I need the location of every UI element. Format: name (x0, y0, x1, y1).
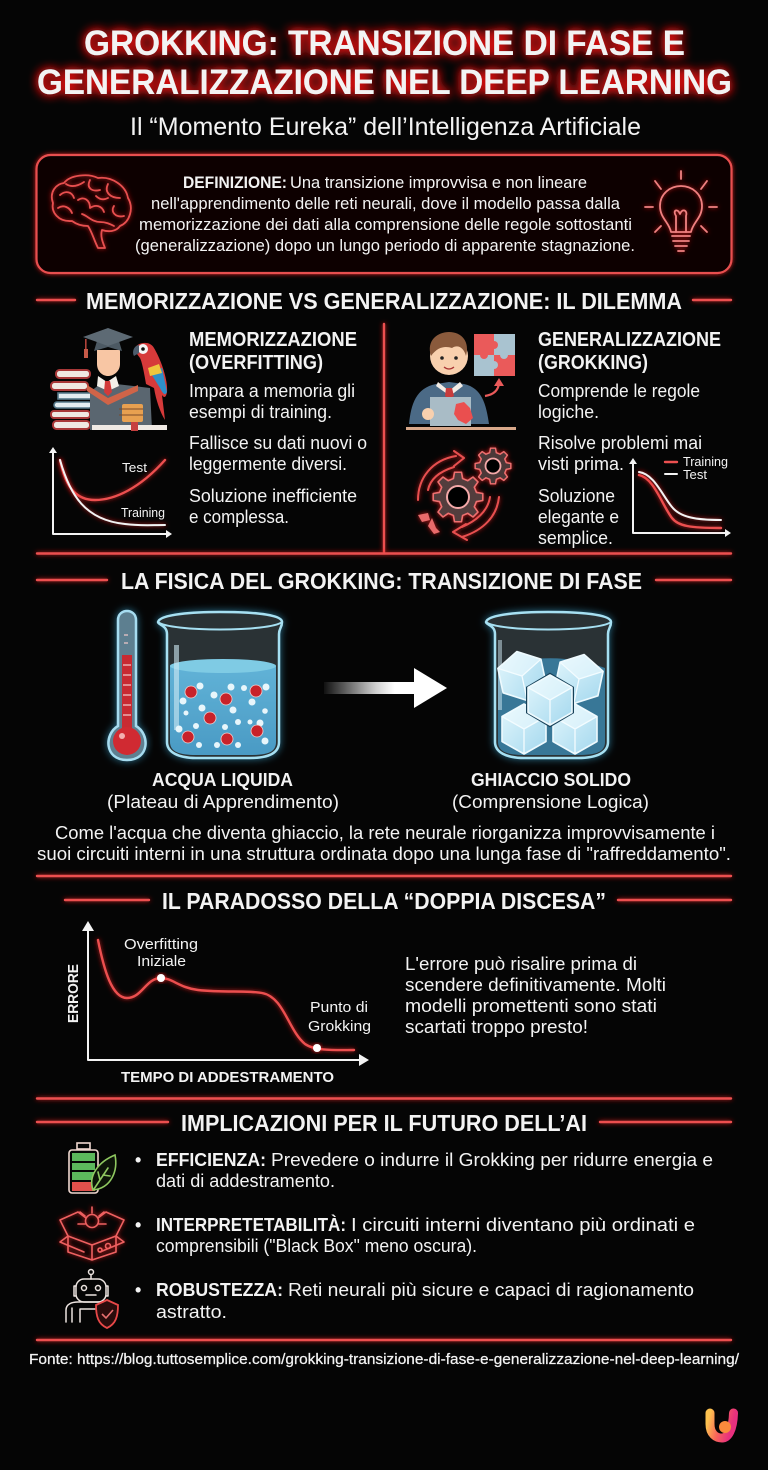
item: interpretabilita: • (135, 1215, 141, 1235)
panel: memorizzazione (49, 328, 367, 538)
text: memorizzazione: leggermente diversi. (189, 454, 347, 474)
icon: robot with shield (66, 1270, 118, 1328)
text: memorizzazione: Fallisce su dati nuovi o (189, 433, 367, 453)
text: memorizzazione: e complessa. (189, 507, 289, 527)
icon: beaker with ice (486, 612, 611, 758)
item: efficienza: EFFICIENZA: (156, 1150, 266, 1170)
title: GROKKING: TRANSIZIONE DI FASE E (84, 24, 685, 63)
item: interpretabilita: comprensibili ("Black Box" meno oscura). (156, 1236, 477, 1256)
item: efficienza: Prevedere o indurre il Grokking per ridurre energia e (271, 1150, 713, 1170)
icon: thermometer (108, 611, 146, 760)
item: efficienza: • (135, 1150, 141, 1170)
text: generalizzazione: Comprende le regole (538, 381, 700, 401)
definition text (135, 173, 635, 255)
text: memorizzazione: Soluzione inefficiente (189, 486, 357, 506)
chart: overfitting: Training (121, 506, 165, 520)
source: Fonte: https://blog.tuttosemplice.com/grokking-transizione-di-fase-e-generalizzazione-nel-deep-learning/ (29, 1351, 740, 1368)
definition text: nell'apprendimento delle reti neurali, dove il modello passa dalla (151, 194, 621, 213)
icon: battery with leaf (69, 1143, 116, 1193)
text: generalizzazione: GENERALIZZAZIONE (538, 329, 721, 351)
heading: memorizzazione vs generalizzazione: MEMORIZZAZIONE VS GENERALIZZAZIONE: IL DILEMMA (86, 288, 682, 314)
icon: graduate, books and parrot (51, 328, 167, 431)
text: double descent explanation: scartati troppo presto! (405, 1017, 588, 1037)
chart: double descent: Overfitting (124, 936, 198, 953)
chart: grokking: Training (683, 455, 728, 469)
heading: doppia discesa: IL PARADOSSO DELLA “DOPPIA DISCESA” (162, 888, 606, 914)
item: interpretabilita (135, 1214, 695, 1256)
label: ghiaccio solido: GHIACCIO SOLIDO (471, 770, 631, 790)
text: generalizzazione: visti prima. (538, 454, 624, 474)
chart: overfitting: Test (122, 461, 148, 475)
panel: generalizzazione (406, 329, 731, 548)
text: generalizzazione: logiche. (538, 402, 599, 422)
text: memorizzazione: esempi di training. (189, 402, 332, 422)
definition text: (generalizzazione) dopo un lungo periodo di apparente stagnazione. (135, 236, 635, 255)
item: robustezza (135, 1280, 694, 1322)
label: ghiaccio solido (452, 770, 649, 812)
text: double descent explanation: L'errore può risalire prima di (405, 954, 637, 974)
chart: double descent (65, 921, 371, 1086)
text: water analogy: Come l'acqua che diventa ghiaccio, la rete neurale riorganizza improvvisamente i (55, 823, 715, 843)
title (37, 24, 732, 102)
definition text: Una transizione improvvisa e non lineare (290, 173, 587, 192)
text: memorizzazione: Impara a memoria gli (189, 381, 355, 401)
panel: definition (36, 155, 732, 273)
item: interpretabilita: INTERPRETETABILITÀ: (156, 1214, 346, 1235)
arrow: phase transition (324, 668, 447, 708)
text: generalizzazione: Risolve problemi mai (538, 433, 702, 453)
item: robustezza: Reti neurali più sicure e capaci di ragionamento (288, 1280, 694, 1300)
icon: open box with gear (60, 1207, 124, 1260)
subtitle: Il “Momento Eureka” dell’Intelligenza Artificiale (130, 113, 641, 141)
chart: double descent: Iniziale (137, 953, 186, 970)
heading: la fisica del grokking: LA FISICA DEL GROKKING: TRANSIZIONE DI FASE (121, 568, 642, 594)
text: memorizzazione: MEMORIZZAZIONE (189, 329, 357, 351)
text: double descent explanation (405, 954, 666, 1037)
label: ghiaccio solido: (Comprensione Logica) (452, 792, 649, 812)
icon: brain (52, 175, 131, 248)
chart: grokking (629, 455, 731, 537)
text: generalizzazione: elegante e (538, 507, 619, 527)
divider: center (383, 324, 385, 552)
chart: double descent: Punto di (310, 999, 368, 1016)
item: interpretabilita: I circuiti interni diventano più ordinati e (351, 1215, 695, 1235)
icon: gears (418, 448, 511, 540)
item: robustezza: ROBUSTEZZA: (156, 1280, 283, 1300)
text: double descent explanation: scendere definitivamente. Molti (405, 975, 666, 995)
definition text: DEFINIZIONE: (183, 173, 287, 192)
chart: grokking: Test (683, 468, 708, 482)
text: generalizzazione: Soluzione (538, 486, 615, 506)
heading: implicazioni: IMPLICAZIONI PER IL FUTURO DELL’AI (181, 1110, 587, 1136)
text: water analogy (37, 823, 731, 864)
text: generalizzazione: semplice. (538, 528, 613, 548)
item: robustezza: astratto. (156, 1302, 227, 1322)
icon: light bulb (645, 171, 717, 251)
label: acqua liquida (107, 770, 339, 812)
text: water analogy: suoi circuiti interni in una struttura ordinata dopo una lunga fase di "raffreddamento". (37, 844, 731, 864)
chart: double descent: ERRORE (65, 964, 82, 1023)
item: efficienza: dati di addestramento. (156, 1171, 335, 1191)
logo (710, 1413, 734, 1438)
text: double descent explanation: modelli promettenti sono stati (405, 996, 657, 1016)
label: acqua liquida: ACQUA LIQUIDA (152, 770, 293, 790)
chart: overfitting (49, 447, 172, 538)
icon: beaker with liquid water (158, 612, 282, 758)
text: generalizzazione: (GROKKING) (538, 352, 648, 374)
text: memorizzazione (189, 329, 367, 527)
title: GENERALIZZAZIONE NEL DEEP LEARNING (37, 63, 732, 102)
icon: person with puzzle (406, 332, 516, 430)
chart: double descent: Grokking (308, 1018, 371, 1035)
definition text: memorizzazione dei dati alla comprensione delle regole sottostanti (139, 215, 632, 234)
label: acqua liquida: (Plateau di Apprendimento) (107, 792, 339, 812)
text: generalizzazione (538, 329, 721, 548)
item: efficienza (135, 1150, 713, 1191)
text: memorizzazione: (OVERFITTING) (189, 352, 323, 374)
item: robustezza: • (135, 1280, 141, 1300)
chart: double descent: TEMPO DI ADDESTRAMENTO (121, 1069, 334, 1086)
